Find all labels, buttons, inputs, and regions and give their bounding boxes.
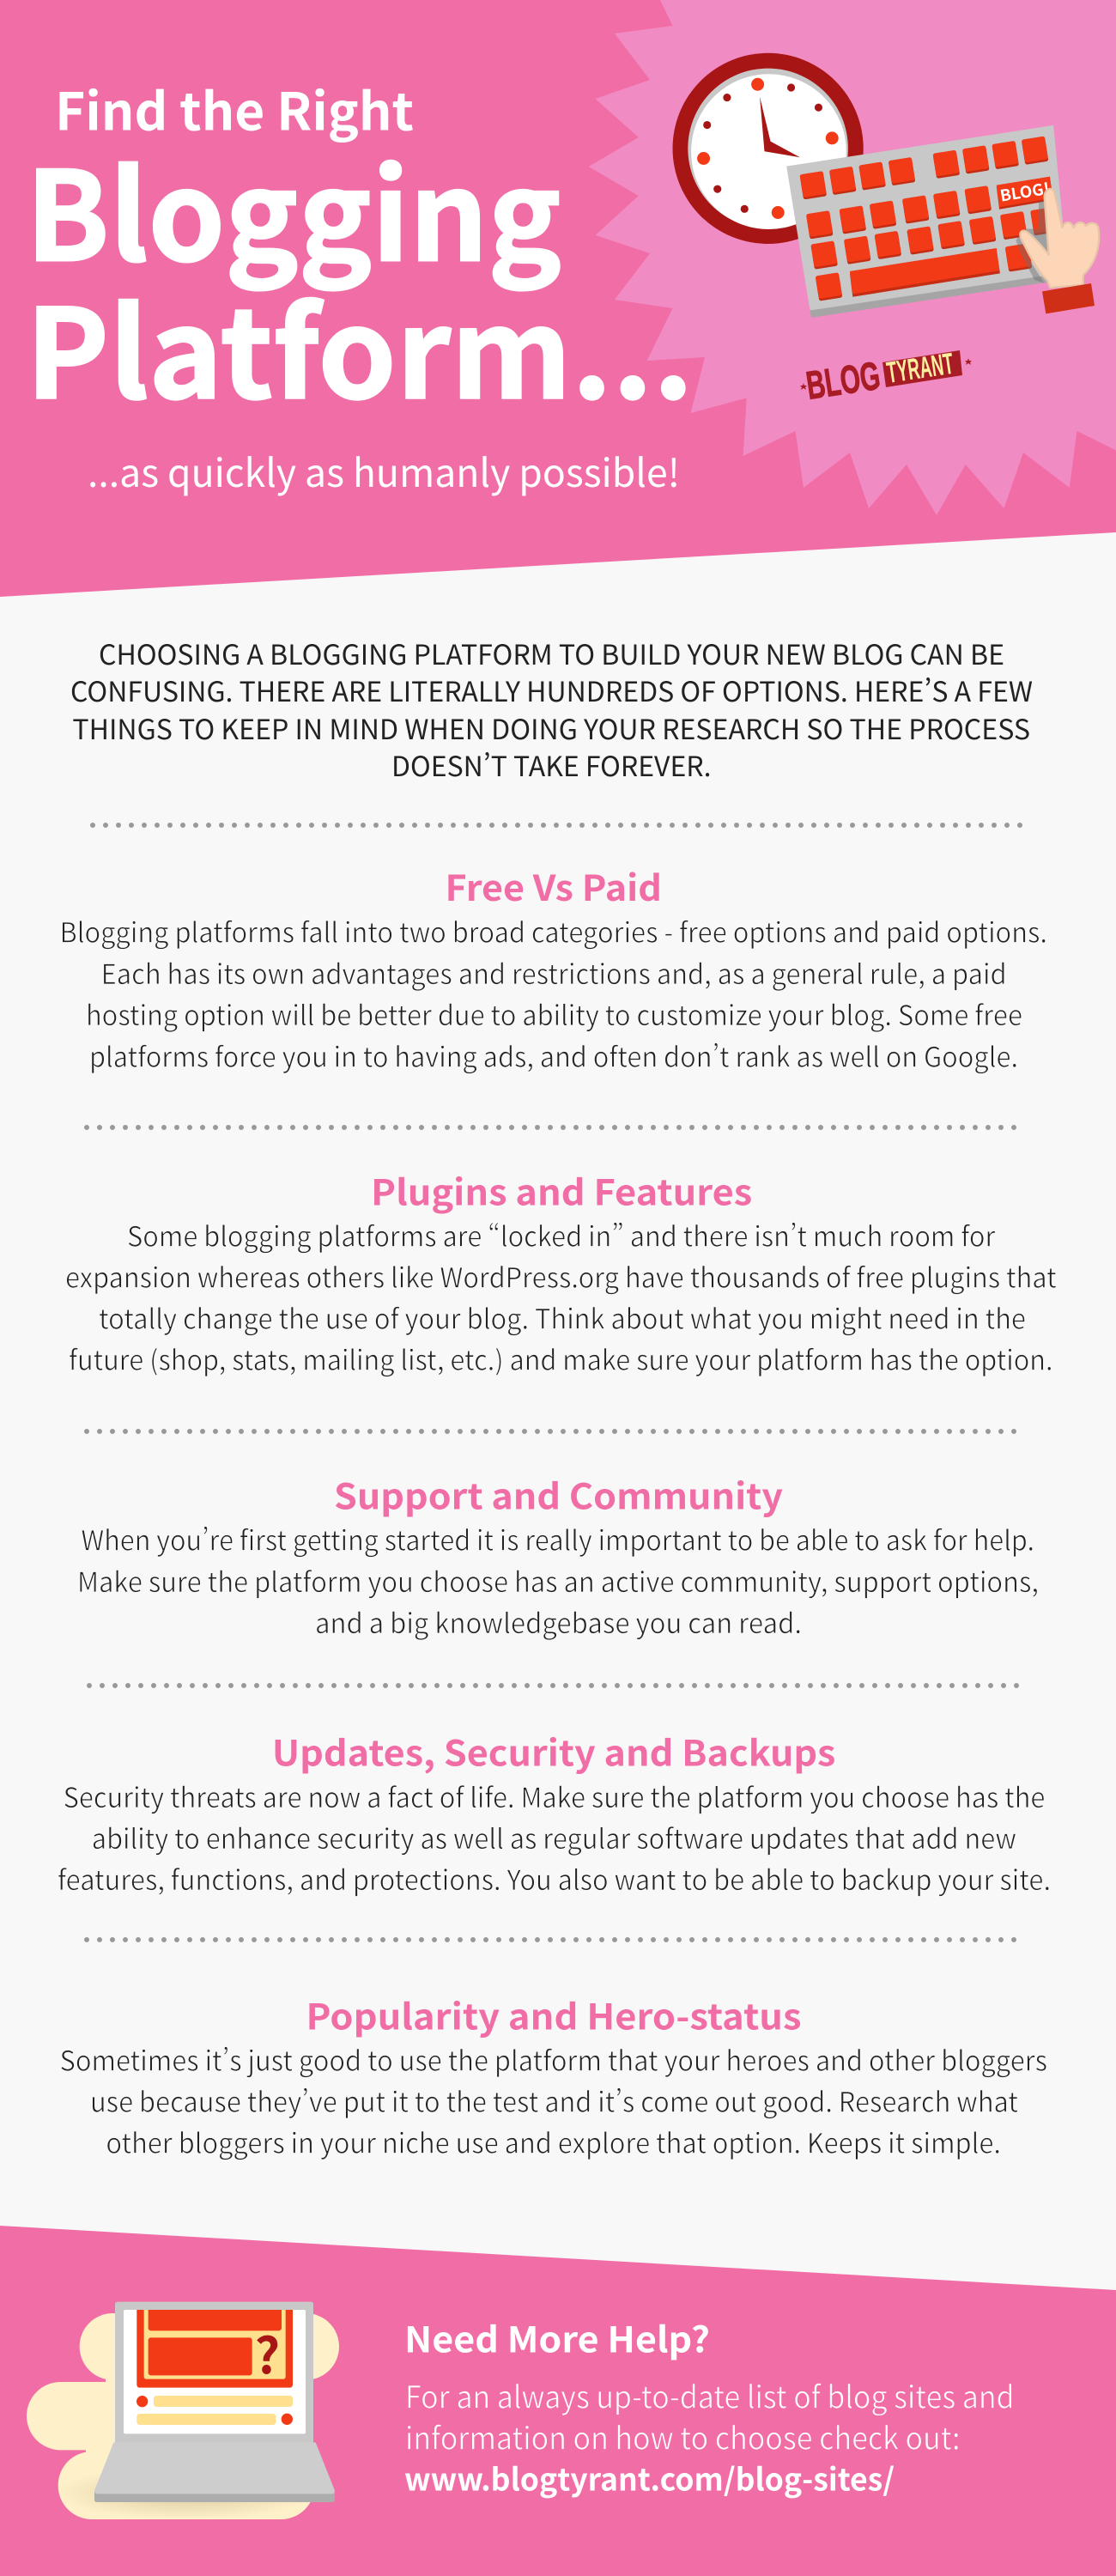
base	[94, 2442, 335, 2502]
body: When you’re first getting started it is really important to be able to ask for help.	[81, 1520, 1034, 1559]
heading: Plugins and Features	[371, 1163, 752, 1215]
cloud	[27, 2313, 339, 2519]
logo: Blog Tyrant	[800, 347, 972, 408]
body: expansion whereas others like WordPress.org have thousands of free plugins that	[65, 1256, 1057, 1296]
question mark: ?	[255, 2316, 280, 2388]
intro text: CHOOSING A BLOGGING PLATFORM TO BUILD YOUR NEW BLOG CAN BE	[99, 634, 1004, 673]
body: Some blogging platforms are “locked in” and there isn’t much room for	[127, 1216, 996, 1255]
call to action text: www.blogtyrant.com/blog-sites/	[404, 2456, 895, 2500]
title: Blogging	[26, 118, 561, 297]
body: use because they’ve put it to the test and it’s come out good. Research what	[90, 2081, 1018, 2121]
body: and a big knowledgebase you can read.	[315, 1602, 802, 1642]
section: Updates, Security and Backups	[58, 1725, 1051, 1899]
body	[58, 1777, 1051, 1899]
title: ...as quickly as humanly possible!	[88, 442, 680, 498]
body	[65, 1216, 1057, 1378]
heading: Support and Community	[334, 1467, 783, 1519]
icon: laptop on cloud	[27, 2302, 339, 2519]
body: Each has its own advantages and restrictions and, as a general rule, a paid	[101, 953, 1007, 993]
starburst background	[589, 0, 1116, 515]
body: ability to enhance security as well as regular software updates that add new	[92, 1818, 1016, 1857]
body: Security threats are now a fact of life. Make sure the platform you choose has the	[64, 1777, 1045, 1816]
intro text: DOESN’T TAKE FOREVER.	[391, 745, 711, 785]
stars	[800, 358, 972, 390]
body	[77, 1520, 1039, 1642]
title	[26, 70, 694, 498]
section: Free Vs Paid	[60, 860, 1047, 1075]
section: Support and Community	[77, 1467, 1039, 1642]
icon: clock	[672, 53, 864, 244]
call to action text	[404, 2311, 1015, 2500]
body: Sometimes it’s just good to use the platform that your heroes and other bloggers	[60, 2040, 1047, 2080]
heading: Free Vs Paid	[445, 860, 662, 911]
body: features, functions, and protections. You also want to be able to backup your site.	[58, 1859, 1051, 1899]
intro text: THINGS TO KEEP IN MIND WHEN DOING YOUR RESEARCH SO THE PROCESS	[72, 708, 1030, 748]
icon: hand	[1016, 189, 1099, 313]
heading: Updates, Security and Backups	[272, 1725, 835, 1777]
call to action text: Need More Help?	[404, 2311, 710, 2362]
body: platforms force you in to having ads, and often don’t rank as well on Google.	[89, 1036, 1018, 1075]
body	[60, 2040, 1047, 2162]
body: hosting option will be better due to ability to customize your blog. Some free	[86, 994, 1022, 1034]
logo: Blog Tyrant: BLOG	[804, 353, 883, 408]
call to action text: information on how to choose check out:	[405, 2415, 960, 2459]
body: future (shop, stats, mailing list, etc.) and make sure your platform has the option.	[69, 1339, 1052, 1378]
logo: Blog Tyrant: TYRANT	[884, 347, 955, 390]
sleeve	[1042, 283, 1095, 313]
intro text: CONFUSING. THERE ARE LITERALLY HUNDREDS OF OPTIONS. HERE’S A FEW	[70, 671, 1033, 710]
intro text	[70, 634, 1033, 785]
call to action text: For an always up-to-date list of blog sites and	[405, 2372, 1015, 2417]
footer panel	[0, 2226, 1116, 2576]
body: Blogging platforms fall into two broad categories - free options and paid options.	[60, 912, 1047, 951]
body	[60, 912, 1047, 1075]
header banner	[0, 0, 1116, 597]
body: other bloggers in your niche use and explore that option. Keeps it simple.	[106, 2123, 1001, 2162]
body: totally change the use of your blog. Think about what you might need in the	[99, 1297, 1026, 1337]
icon: keyboard	[786, 125, 1068, 318]
title: Platform...	[26, 256, 694, 434]
heading: Popularity and Hero-status	[306, 1988, 802, 2039]
BLOG key: BLOG!	[998, 177, 1051, 207]
section: Popularity and Hero-status	[60, 1988, 1047, 2162]
section: Plugins and Features	[65, 1163, 1057, 1378]
screen	[115, 2302, 313, 2445]
title: Find the Right	[55, 70, 414, 146]
body: Make sure the platform you choose has an active community, support options,	[77, 1561, 1039, 1601]
